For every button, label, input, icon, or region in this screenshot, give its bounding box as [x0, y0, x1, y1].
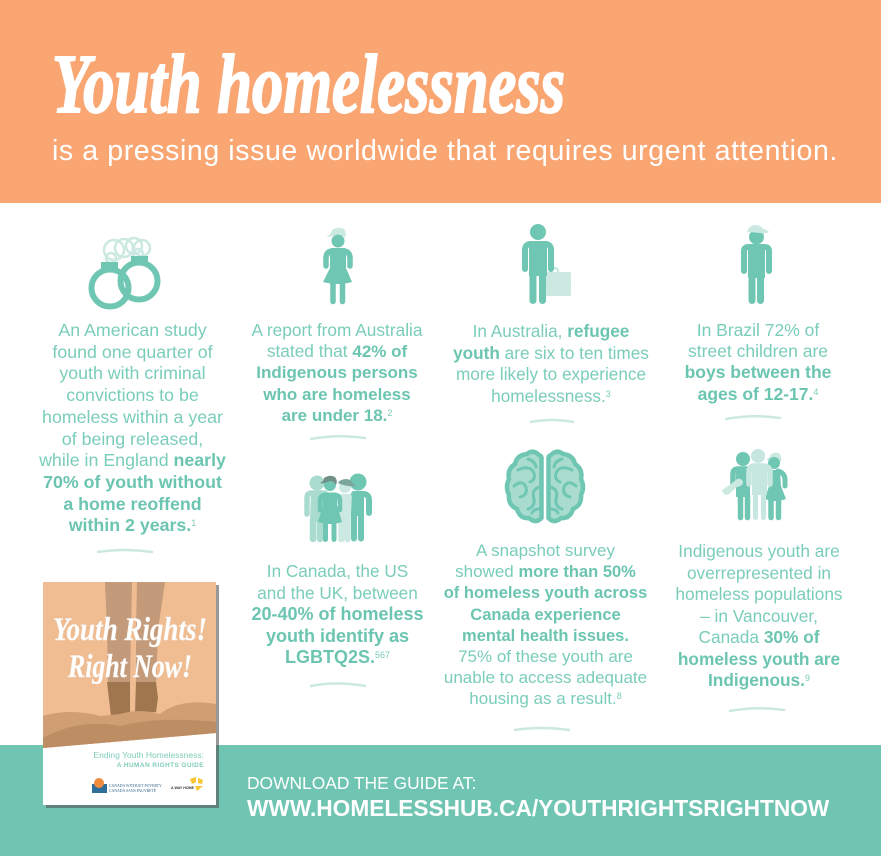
text: American study: An American study: [58, 320, 207, 340]
footer band: [0, 745, 881, 856]
text: Brazil: street children are: [688, 341, 828, 361]
text: LGBTQ2S: In Canada, the US: [267, 561, 408, 581]
header band: [0, 0, 881, 203]
text: Brazil: ages of 12-17.4: [698, 384, 818, 404]
text: mental health: [444, 541, 647, 708]
text: American study: while in England nearly: [39, 450, 226, 470]
text: mental health: of homeless youth across: [444, 584, 647, 602]
text: Indigenous youth: [675, 541, 843, 690]
cover subtitle: Ending Youth Homelessness:: [93, 750, 204, 760]
text: mental health: showed more than 50%: [455, 562, 636, 581]
text: Indigenous youth: Indigenous youth are: [678, 541, 840, 561]
text: American study: youth with criminal: [59, 363, 206, 383]
text: Indigenous youth: homeless populations: [675, 584, 843, 604]
text: LGBTQ2S: and the UK, between: [257, 582, 418, 602]
text: Australia Indigenous: who are homeless: [263, 385, 411, 404]
icon: family with child hand: [722, 449, 788, 520]
guide cover: [43, 582, 219, 808]
text: American study: [39, 320, 226, 535]
subtitle: is a pressing issue worldwide that requires urgent attention.: [52, 135, 838, 167]
boots: [107, 682, 130, 716]
icon: boy with cap: [741, 225, 772, 304]
text: Australia Indigenous: [252, 320, 422, 425]
legs: [105, 582, 132, 685]
text: Brazil: In Brazil 72% of: [697, 320, 819, 340]
text: Indigenous youth: Canada 30% of: [698, 627, 820, 647]
icon: handcuffs: [88, 236, 160, 310]
text: LGBTQ2S: youth identify as: [266, 626, 409, 646]
guide cover: CANADA SANS PAUVRETÉ: [109, 788, 157, 793]
text: American study: of being released,: [62, 429, 203, 449]
text: American study: a home reoffend: [63, 494, 202, 514]
text: LGBTQ2S: [251, 561, 424, 667]
text: Australia Indigenous: A report from Australia: [252, 320, 422, 340]
text: American study: within 2 years.1: [69, 515, 196, 535]
download url: WWW.HOMELESSHUB.CA/YOUTHRIGHTSRIGHTNOW: [247, 795, 829, 821]
text: LGBTQ2S: LGBTQ2S.567: [285, 647, 390, 667]
guide cover: A WAY HOME: [171, 786, 195, 790]
text: Brazil: boys between the: [685, 362, 831, 382]
guide cover: CANADA WITHOUT POVERTY: [109, 784, 162, 788]
text: mental health: unable to access adequate: [444, 668, 647, 687]
text: mental health: A snapshot survey: [476, 541, 615, 560]
text: Indigenous youth: overrepresented in: [687, 562, 831, 582]
text: Australia Indigenous: Indigenous persons: [256, 363, 418, 382]
icon: refugee with suitcase: [522, 224, 571, 304]
text: mental health: housing as a result.8: [469, 689, 622, 708]
text: Australia Indigenous: stated that 42% of: [267, 341, 407, 361]
icon: brain: [504, 449, 586, 524]
text: Australia refugee: youth are six to ten times: [453, 343, 649, 363]
cover title: Right Now!: [67, 649, 192, 685]
cover title: [53, 612, 207, 685]
ground: [43, 702, 216, 748]
text: Australia refugee: homelessness.3: [491, 386, 611, 406]
text: LGBTQ2S: 20-40% of homeless: [251, 604, 424, 624]
text: American study: convictions to be: [66, 385, 199, 405]
text: American study: 70% of youth without: [43, 472, 222, 492]
text: Australia refugee: In Australia, refugee: [473, 321, 629, 341]
text: Australia Indigenous: are under 18.2: [282, 406, 392, 425]
text: Australia refugee: [453, 321, 649, 406]
text: Indigenous youth: homeless youth are: [678, 648, 840, 668]
text: mental health: Canada experience: [470, 606, 621, 624]
text: Indigenous youth: – in Vancouver,: [700, 606, 818, 626]
cover logos: [92, 784, 107, 793]
text: Australia refugee: more likely to experience: [456, 364, 646, 384]
text: mental health: mental health issues.: [462, 627, 629, 645]
guide cover: A HUMAN RIGHTS GUIDE: [117, 762, 204, 769]
text: American study: homeless within a year: [42, 407, 223, 427]
text: Brazil: [685, 320, 831, 404]
text: American study: found one quarter of: [52, 342, 213, 362]
text: mental health: 75% of these youth are: [458, 647, 633, 666]
icon: girl: [323, 228, 353, 304]
icon: group of four: [304, 474, 372, 542]
text: Indigenous youth: Indigenous.9: [708, 670, 810, 690]
download label: DOWNLOAD THE GUIDE AT:: [247, 773, 476, 793]
